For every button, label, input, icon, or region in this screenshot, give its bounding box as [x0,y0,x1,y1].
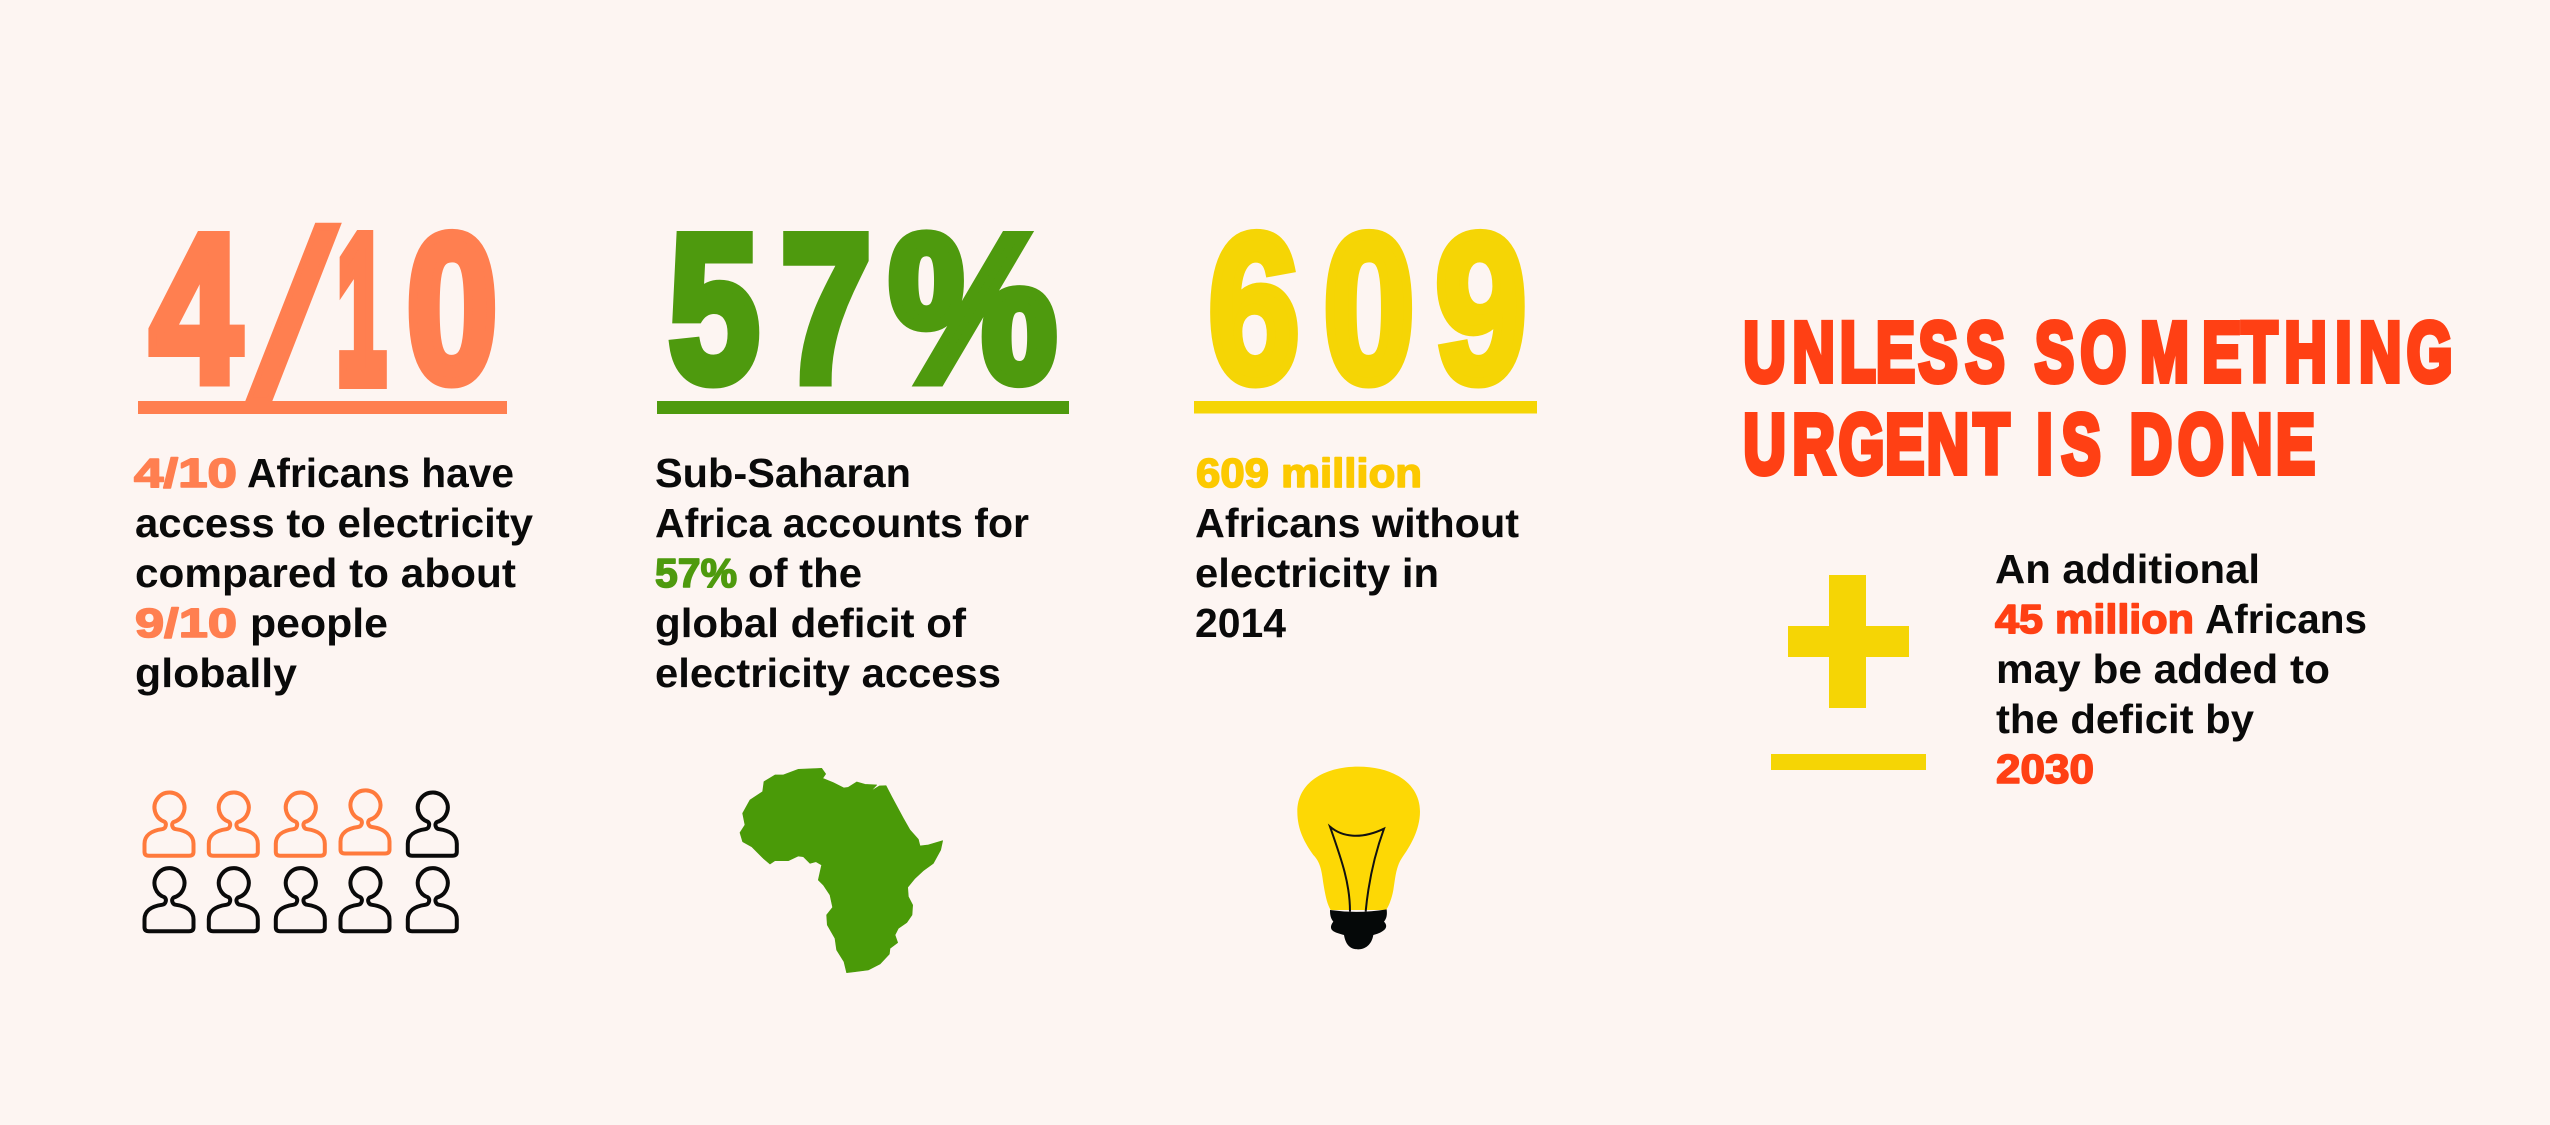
heading: unless something urgent is done [1743,306,2453,492]
underline: 609 [1194,401,1537,414]
text block: 4/10 Africans have access: compared to about [135,550,516,596]
heading: unless something urgent is done: URGENT IS DONE [1743,398,2315,492]
big number: 57%: % [889,192,1057,426]
text block: 609 million Africans: 2014 [1195,600,1286,646]
text block: Sub-Saharan Africa deficit: global deficit of [655,600,966,646]
text block: Sub-Saharan Africa deficit [655,450,1029,696]
text block: 4/10 Africans have access: Africans have [247,450,514,496]
text block: 4/10 Africans have access [134,450,533,696]
icon: ten people, four highlighted [144,790,457,931]
text block: additional 45 million: 45 million [1995,596,2194,642]
panel: 57% of global deficit [655,191,1069,973]
big number: 4/10: 4 [150,191,241,426]
icon: light bulb [1297,767,1420,949]
icon: minus sign [1771,754,1926,770]
text block: additional 45 million: the deficit by [1996,696,2254,742]
text block: Sub-Saharan Africa deficit: of the [748,550,862,596]
text block: 609 million Africans: 609 million [1196,450,1422,496]
panel: unless something urgent is done [1743,306,2453,792]
panel: 4/10 access to electricity [134,184,533,931]
text block: additional 45 million [1995,546,2367,792]
text block: Sub-Saharan Africa deficit: electricity access [655,650,1001,696]
text block: 609 million Africans: electricity in [1195,550,1439,596]
big number: 4/10: 1 [338,196,385,424]
icon: map of Africa [740,768,943,973]
underline: 57% [657,401,1069,414]
text block: 4/10 Africans have access: people [250,600,388,646]
text block: 4/10 Africans have access: access to electricity [135,500,533,546]
big number: 4/10: / [235,184,350,447]
text block: additional 45 million: 2030 [1996,746,2094,792]
text block: Sub-Saharan Africa deficit: Sub-Saharan [655,450,911,496]
big number: 57%: 57 [668,191,872,426]
underline: 4/10 [138,401,507,414]
text block: additional 45 million: may be added to [1996,646,2330,692]
icon: plus sign [1788,575,1909,708]
big number: 57% [668,191,1057,426]
heading: unless something urgent is done: UNLESS SOMETHING [1743,306,2453,400]
text block: 609 million Africans [1195,450,1519,646]
big number: 4/10: 0 [406,191,498,426]
text block: Sub-Saharan Africa deficit: Africa accounts for [655,500,1029,546]
big number: 609: 609 [1208,191,1527,426]
text block: 4/10 Africans have access: globally [135,650,297,696]
text block: 4/10 Africans have access: 9/10 [135,600,237,646]
panel: 609 million without electricity [1194,191,1537,949]
text block: additional 45 million: Africans [2205,596,2367,642]
text block: additional 45 million: An additional [1995,546,2260,592]
big number: 4/10 [150,184,498,447]
text block: 609 million Africans: Africans without [1195,500,1519,546]
text block: Sub-Saharan Africa deficit: 57% [655,550,737,596]
text block: 4/10 Africans have access: 4/10 [134,450,237,496]
